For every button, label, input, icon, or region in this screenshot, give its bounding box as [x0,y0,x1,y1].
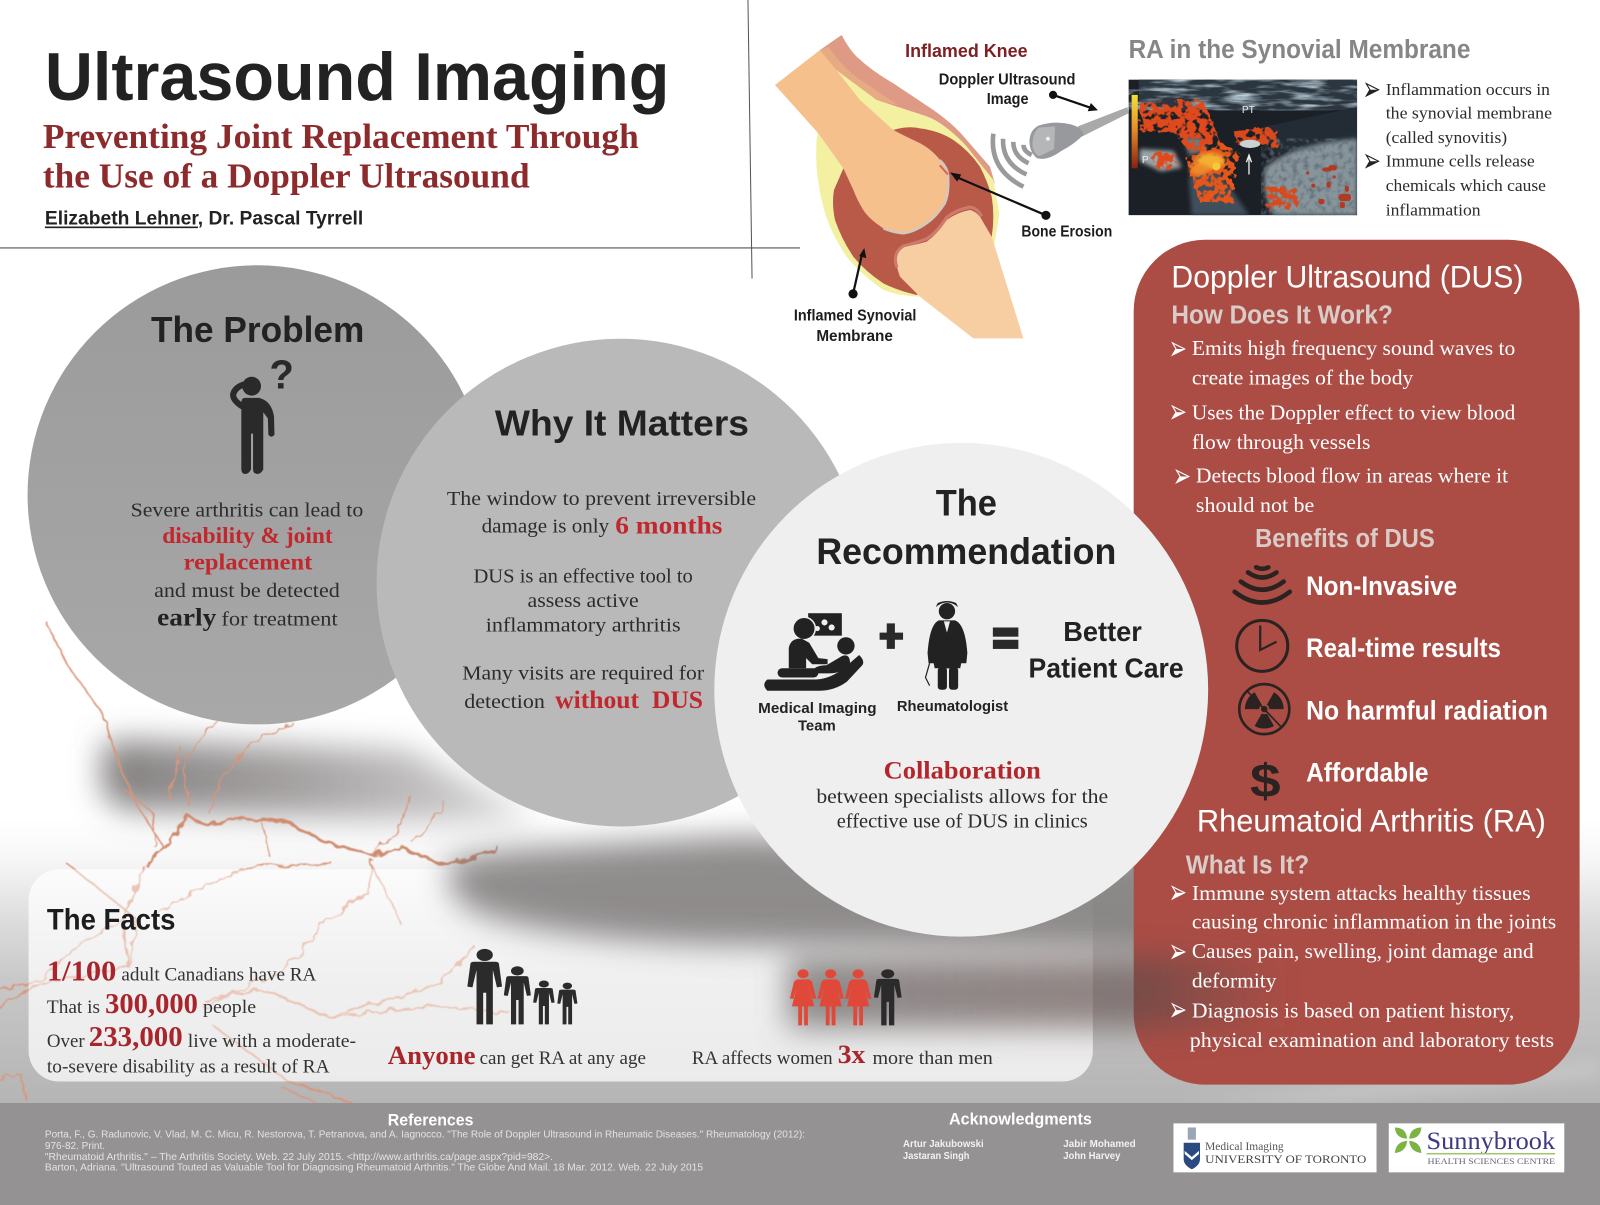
title block [43,40,669,229]
femur [775,50,948,233]
footer band [0,1103,1600,1205]
fact lines: 233,000 [89,1022,183,1053]
problem text: for treatment [221,608,338,630]
role labels: Medical Imaging [758,701,877,717]
icon: confused person: ? [269,352,294,398]
knee labels: Doppler Ultrasound [939,72,1076,89]
why it matters text: 6 months [615,511,723,540]
fact lines: 300,000 [105,989,198,1020]
ra bullet list: Causes pain, swelling, joint damage and [1192,939,1534,963]
logo: sunnybrook [1389,1123,1564,1172]
icon: plus [880,623,903,649]
ra bullet list [1172,881,1556,1052]
references: Barton, Adriana. "Ultrasound Touted as Valuable Tool for Diagnosing Rheumatoid Arthritis." The Globe And Mail. 18 Mar. 2012. Web. 22 July 2015 [45,1162,703,1173]
better patient care: Patient Care [1029,652,1184,683]
heading: rheumatoid arthritis: Rheumatoid Arthritis (RA) [1197,803,1546,839]
fact lines: live with a moderate- [188,1031,356,1052]
heading: the recommendation: Recommendation [816,531,1116,572]
fact lines: 1/100 [47,957,116,988]
logo: university of toronto: UNIVERSITY OF TORONTO [1205,1153,1366,1166]
problem text: disability & joint [162,523,333,548]
synovial membrane bullets: Immune cells release [1386,151,1535,170]
references: References [388,1111,473,1129]
panel: the facts content [47,904,993,1077]
panel: the facts [29,869,1093,1082]
dus bullet list: Detects blood flow in areas where it [1196,464,1508,488]
why it matters text: detection [464,691,545,713]
collaboration text: effective use of DUS in clinics [837,810,1088,832]
benefit: real-time results: Real-time results [1306,633,1501,663]
logo: sunnybrook: Sunnybrook [1427,1126,1555,1155]
synovial membrane bullets: (called synovitis) [1386,128,1507,147]
heading: ra in the synovial membrane: RA in the Synovial Membrane [1129,36,1470,64]
dus bullet list: create images of the body [1192,366,1414,390]
acknowledgments: Acknowledgments [949,1110,1092,1128]
synovial membrane bullets: chemicals which cause [1386,176,1546,195]
problem text: Severe arthritis can lead to [131,499,363,521]
why it matters text: Many visits are required for [462,663,704,685]
knee labels [794,40,1112,345]
problem text: replacement [184,549,313,574]
why it matters text: inflammatory arthritis [486,615,681,637]
icon: ultrasound probe [993,91,1129,187]
why it matters text: damage is only [482,516,610,538]
acknowledgments: Jastaran Singh [903,1151,969,1162]
benefit: real-time results [1237,620,1501,671]
authors: Elizabeth Lehner, Dr. Pascal Tyrrell [45,207,363,229]
fact lines [47,957,356,1077]
fact lines: people [203,997,256,1018]
why it matters text: DUS is an effective tool to [473,566,693,588]
dus bullet list: should not be [1196,493,1314,517]
knee labels: Image [987,91,1029,108]
bone erosion arrow [950,172,1051,220]
ra bullet list: physical examination and laboratory tests [1190,1028,1554,1052]
muscle band [820,35,995,184]
illustration: inflamed knee [775,35,1112,345]
heading: the problem: The Problem [151,310,364,350]
knee labels: Bone Erosion [1021,224,1112,241]
caption: women vs men [692,1039,993,1069]
ra bullet list: deformity [1192,969,1277,993]
benefit: non-invasive: Non-Invasive [1306,571,1457,601]
why it matters text [447,488,756,714]
problem text: early [157,602,217,631]
panel: the recommendation [714,443,1208,937]
synovial membrane bullets: inflammation [1386,200,1481,219]
icon: rheumatologist [926,601,967,690]
logo: university of toronto: Medical Imaging [1205,1140,1284,1153]
subtitle [43,117,639,196]
knee labels: Membrane [816,328,893,345]
benefit: no harmful radiation [1239,684,1548,734]
references: 976-82. Print. [45,1141,105,1152]
benefit: no harmful radiation: No harmful radiation [1306,695,1548,725]
synovial membrane arrow [848,248,866,298]
synovial membrane bullets: Inflammation occurs in [1386,80,1551,99]
heading: the recommendation [816,482,1116,572]
why it matters text: The window to prevent irreversible [447,488,756,510]
doppler ultrasound image: PT [1242,105,1255,116]
dus bullet list: Emits high frequency sound waves to [1192,336,1515,360]
benefit: affordable: $ [1250,755,1281,807]
yellow fatty tissue [816,67,999,297]
references: "Rheumatoid Arthritis." – The Arthritis Society. Web. 22 July 2015. <http://www.arthritis.ca/page.aspx?pid=982>. [45,1152,553,1163]
subtitle: Preventing Joint Replacement Through [43,117,639,156]
knee labels: Inflamed Synovial [794,307,916,324]
doppler ultrasound image [1129,80,1357,215]
synovial membrane bullets: the synovial membrane [1386,103,1552,122]
blurred shadow under why it matters circle [448,837,1173,951]
ra bullet list: causing chronic inflammation in the joints [1192,909,1556,933]
subheading: how does it work: How Does It Work? [1171,301,1393,329]
subheading: what is it: What Is It? [1186,851,1309,879]
caption: anyone: Anyone [388,1040,476,1070]
dus bullet list: Uses the Doppler effect to view blood [1192,400,1516,424]
icon: women and man [790,969,902,1025]
acknowledgments: Artur Jakubowski [903,1139,984,1150]
heading: doppler ultrasound: Doppler Ultrasound (DUS) [1171,259,1523,295]
collaboration text: Collaboration [884,756,1041,785]
role labels [758,699,1008,735]
knee labels: Inflamed Knee [905,40,1028,61]
heading: why it matters: Why It Matters [495,404,749,444]
inflamed synovial membrane [833,127,993,295]
benefit: affordable [1250,755,1429,807]
tibia [896,210,1023,338]
blood vessel illustration [0,621,510,1103]
panel: doppler ultrasound and rheumatoid arthritis text [1171,259,1556,1052]
heading: the recommendation: The [936,482,997,523]
caption: anyone: can get RA at any age [480,1048,646,1069]
dus bullet list [1172,336,1516,517]
benefit: non-invasive [1235,567,1457,602]
caption: women vs men: 3x [838,1039,866,1069]
ra bullet list: Immune system attacks healthy tissues [1192,881,1531,905]
better patient care: Better [1063,616,1142,647]
problem text [131,499,363,631]
dus bullet list: flow through vessels [1192,430,1370,454]
caption: anyone [388,1040,646,1070]
better patient care [1029,616,1184,683]
role labels: Rheumatologist [897,699,1008,715]
synovial membrane bullets [1366,80,1552,219]
collaboration text: between specialists allows for the [816,786,1108,808]
why it matters text: assess active [528,590,639,612]
caption: women vs men: RA affects women [692,1048,833,1069]
subheading: benefits of dus: Benefits of DUS [1255,525,1435,553]
panel: why it matters [377,339,864,826]
logo: university of toronto [1173,1123,1377,1172]
doppler ultrasound image: P [1142,155,1149,166]
icon: confused person [233,352,294,474]
collaboration text [816,756,1108,832]
logo: sunnybrook: HEALTH SCIENCES CENTRE [1428,1157,1555,1166]
fact lines: Over [47,1031,85,1052]
blurred shadow across facts panel and card [788,957,1298,1028]
panel: the problem [28,265,487,724]
heading: the facts: The Facts [47,904,176,937]
references: Porta, F., G. Radunovic, V. Vlad, M. C. Micu, R. Nestorova, T. Petranova, and A. Iagnocco. "The Role of Doppler Ultrasound in Rheumatic Diseases." Rheumatology (2012): [45,1130,805,1141]
caption: women vs men: more than men [872,1048,993,1069]
subtitle: the Use of a Doppler Ultrasound [43,157,530,196]
why it matters text: without DUS [555,685,703,714]
acknowledgments: Jabir Mohamed [1063,1139,1136,1150]
acknowledgments [903,1110,1136,1162]
benefit: affordable: Affordable [1306,758,1429,788]
problem text: and must be detected [154,580,340,602]
icon: equals [993,627,1018,649]
fact lines: That is [47,997,100,1018]
blurred shadow under problem circle [102,740,541,822]
role labels: Team [798,719,836,735]
fact lines: to-severe disability as a result of RA [47,1056,330,1077]
ra bullet list: Diagnosis is based on patient history, [1192,998,1514,1022]
icon: medical imaging team [764,613,863,691]
icon: family [467,949,577,1024]
references [45,1111,805,1173]
fact lines: adult Canadians have RA [121,965,317,986]
panel: doppler ultrasound card [1134,240,1580,1085]
acknowledgments: John Harvey [1063,1151,1121,1162]
title: Ultrasound Imaging [45,40,669,115]
